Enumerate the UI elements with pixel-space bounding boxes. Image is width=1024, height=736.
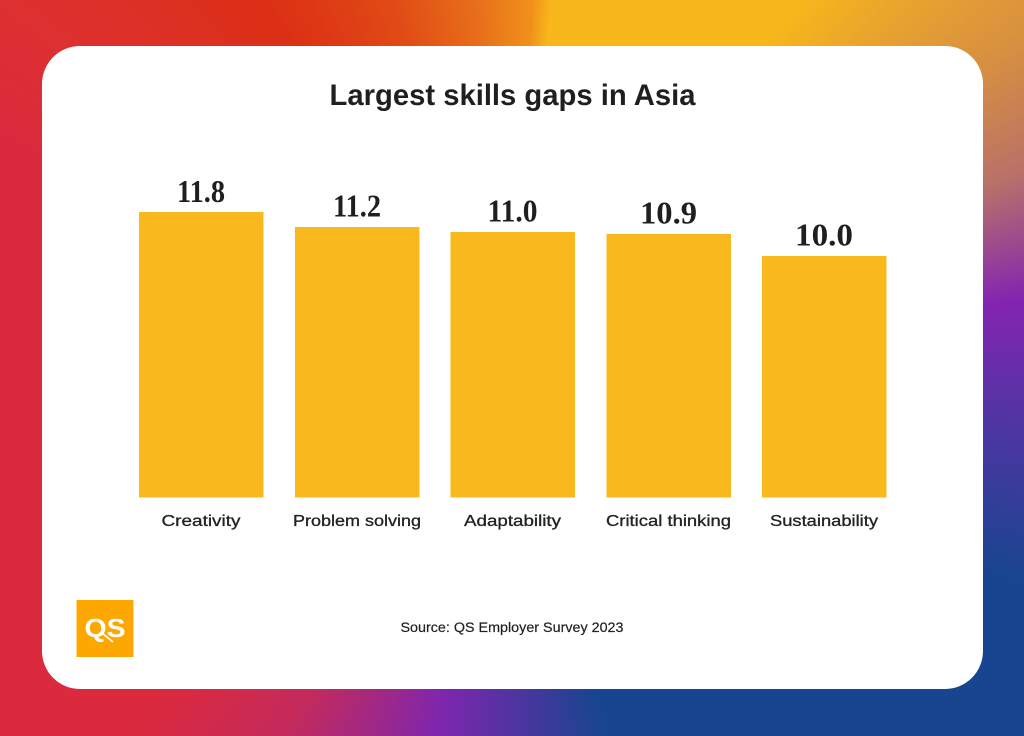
bar: Adaptability: 11.0 [488, 192, 538, 228]
icon: QS logo: QS [84, 613, 126, 643]
bar: Sustainability: Sustainability [770, 513, 878, 530]
bar: Creativity [139, 173, 264, 530]
icon: QS logo [76, 600, 134, 657]
bar chart [139, 173, 886, 530]
bar: Creativity: Creativity [162, 513, 241, 530]
bar: Problem solving [293, 188, 421, 530]
bar: Critical thinking: 10.9 [640, 194, 697, 230]
bar: Problem solving: 11.2 [333, 188, 381, 224]
bar: Problem solving: Problem solving [293, 513, 421, 530]
bar: Critical thinking: Critical thinking [606, 513, 731, 530]
source note: Source: QS Employer Survey 2023 [400, 620, 624, 635]
title: Largest skills gaps in Asia [330, 79, 696, 112]
bar: Sustainability [762, 216, 886, 530]
bar: Critical thinking [606, 194, 731, 530]
bar: Adaptability [450, 192, 575, 530]
bar: Sustainability: 10.0 [795, 216, 853, 252]
bar: Creativity: 11.8 [177, 173, 225, 209]
bar: Adaptability: Adaptability [464, 513, 561, 530]
